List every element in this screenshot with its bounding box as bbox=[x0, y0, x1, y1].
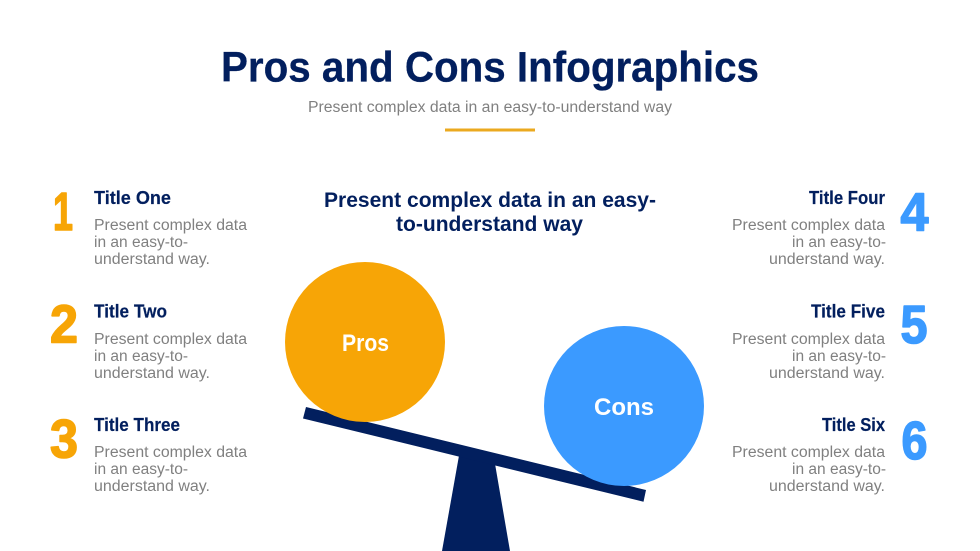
item 4: Title Four: 4 bbox=[900, 182, 928, 242]
item 2: Title Two: understand way. bbox=[94, 365, 210, 382]
item 2: Title Two: 2 bbox=[50, 294, 78, 354]
item 2: Title Two bbox=[50, 294, 247, 382]
item 4: Title Four: Present complex data bbox=[732, 217, 885, 234]
item 4: Title Four bbox=[732, 182, 928, 268]
item 4: Title Four: understand way. bbox=[769, 251, 885, 268]
cons circle bbox=[544, 326, 704, 486]
item 3: Title Three: 3 bbox=[50, 410, 78, 470]
item 5: Title Five: understand way. bbox=[769, 365, 885, 382]
pros circle: Pros bbox=[342, 330, 389, 357]
item 2: Title Two: in an easy-to- bbox=[94, 348, 188, 365]
item 4: Title Four: Title Four bbox=[809, 187, 885, 208]
item 6: Title Six: in an easy-to- bbox=[792, 461, 886, 478]
item 5: Title Five: in an easy-to- bbox=[792, 348, 886, 365]
item 3: Title Three bbox=[50, 410, 247, 495]
central heading: Present complex data in an easy- bbox=[324, 189, 656, 212]
item 6: Title Six: understand way. bbox=[769, 478, 885, 495]
item 4: Title Four: in an easy-to- bbox=[792, 234, 886, 251]
item 1: Title One bbox=[53, 182, 247, 268]
item 3: Title Three: Present complex data bbox=[94, 444, 247, 461]
item 6: Title Six: Title Six bbox=[822, 414, 886, 435]
item 1: Title One: Title One bbox=[94, 187, 171, 208]
title underline accent bbox=[445, 128, 535, 132]
central heading: to-understand way bbox=[396, 213, 583, 236]
title: Pros and Cons Infographics bbox=[221, 44, 759, 92]
item 5: Title Five: Title Five bbox=[811, 300, 885, 322]
item 6: Title Six bbox=[732, 411, 928, 495]
item 2: Title Two: Present complex data bbox=[94, 331, 247, 348]
item 1: Title One: Present complex data bbox=[94, 217, 247, 234]
item 6: Title Six: Present complex data bbox=[732, 444, 885, 461]
cons circle: Cons bbox=[594, 394, 654, 421]
central heading bbox=[324, 189, 656, 236]
balance scale beam bbox=[303, 407, 646, 502]
balance scale stand bbox=[442, 450, 510, 551]
item 3: Title Three: in an easy-to- bbox=[94, 461, 188, 478]
item 6: Title Six: 6 bbox=[902, 411, 928, 471]
item 3: Title Three: Title Three bbox=[94, 414, 180, 435]
item 1: Title One: understand way. bbox=[94, 251, 210, 268]
item 1: Title One: in an easy-to- bbox=[94, 234, 188, 251]
subtitle: Present complex data in an easy-to-understand way bbox=[308, 99, 672, 116]
item 5: Title Five bbox=[732, 295, 928, 382]
item 3: Title Three: understand way. bbox=[94, 478, 210, 495]
item 5: Title Five: Present complex data bbox=[732, 331, 885, 348]
item 2: Title Two: Title Two bbox=[94, 300, 167, 322]
pros circle bbox=[285, 262, 445, 422]
item 1: Title One: 1 bbox=[53, 182, 73, 242]
item 5: Title Five: 5 bbox=[900, 295, 928, 355]
